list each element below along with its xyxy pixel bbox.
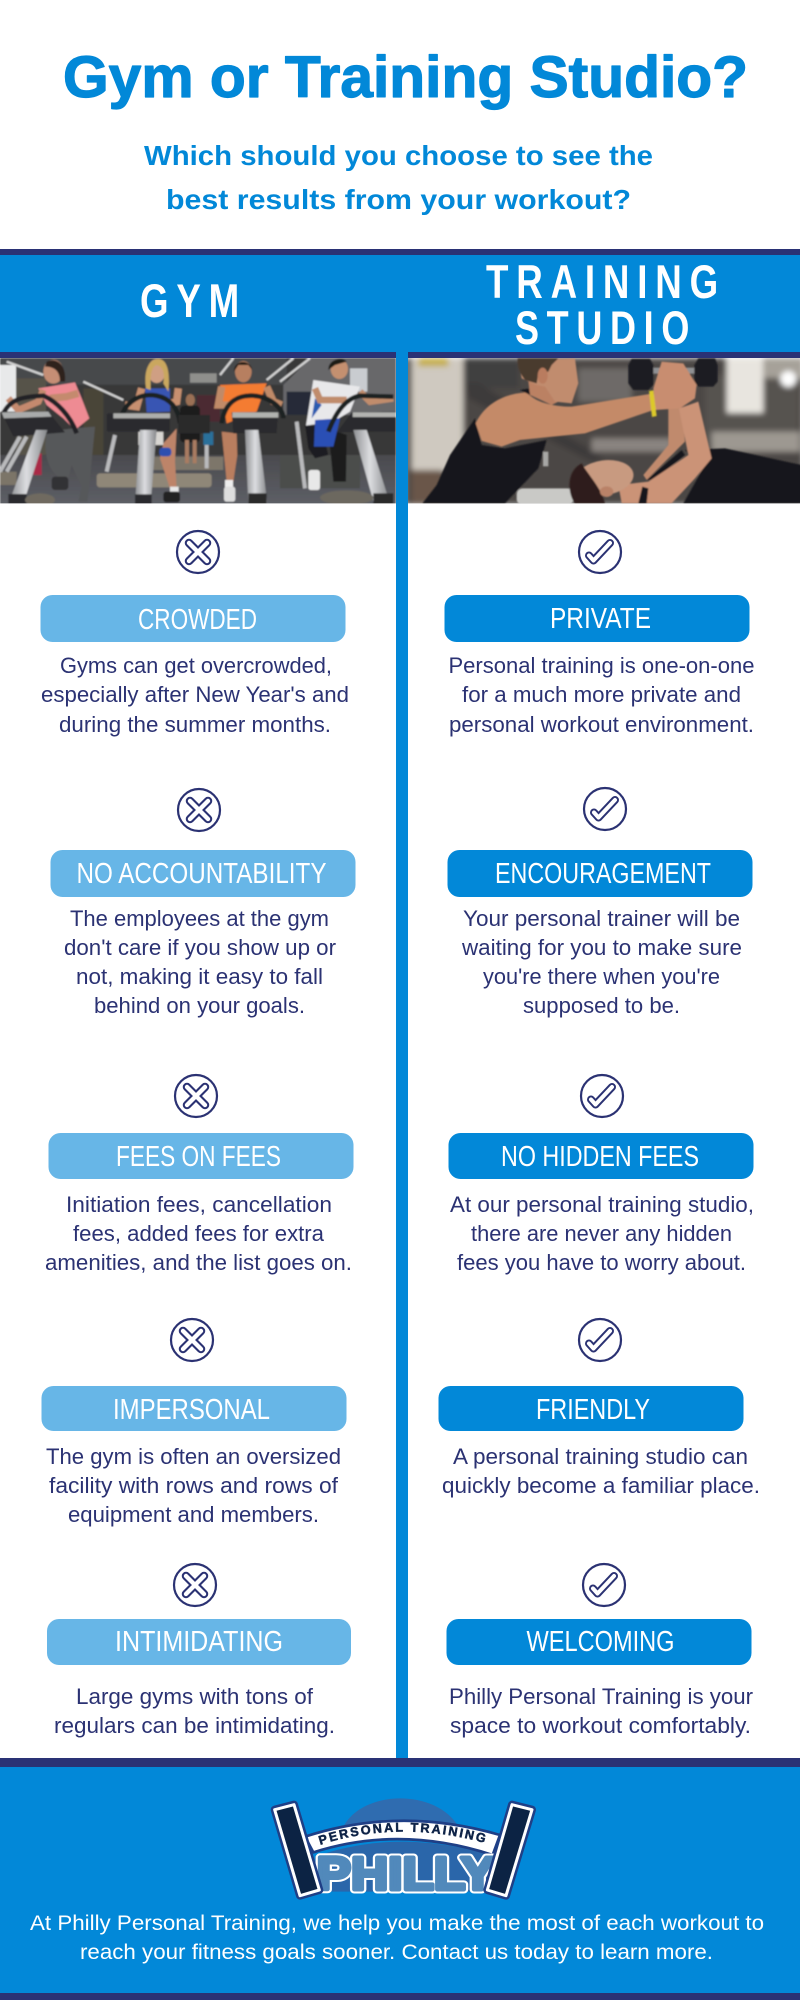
item: impersonal xyxy=(42,1319,346,1527)
text block: supposed to be. xyxy=(523,993,680,1018)
text block: don't care if you show up or xyxy=(64,935,336,960)
pill heading xyxy=(40,595,346,642)
text block xyxy=(442,1444,760,1498)
pill heading xyxy=(42,1386,346,1431)
header band xyxy=(0,249,800,1758)
item: crowded xyxy=(40,531,349,737)
text block xyxy=(41,653,349,737)
icon: check mark xyxy=(579,531,621,573)
text block: The gym is often an oversized xyxy=(46,1444,341,1469)
pill heading: NO ACCOUNTABILITY xyxy=(76,858,326,890)
logo: philly personal training: PHILLY xyxy=(317,1847,495,1899)
text block: fees you have to worry about. xyxy=(457,1250,746,1275)
text block: waiting for you to make sure xyxy=(461,935,742,960)
heading: gym: GYM xyxy=(140,274,247,327)
icon: x mark xyxy=(171,1319,213,1361)
text block: there are never any hidden xyxy=(471,1221,732,1246)
pill heading xyxy=(438,1386,744,1431)
subtitle: best results from your workout? xyxy=(166,184,631,215)
icon: x mark xyxy=(174,1564,216,1606)
wristband xyxy=(649,390,657,417)
text block: A personal training studio can xyxy=(453,1444,748,1469)
pill heading: CROWDED xyxy=(138,604,257,636)
text block: you're there when you're xyxy=(483,964,720,989)
text block xyxy=(46,1444,341,1527)
icon: x mark xyxy=(178,789,220,831)
text block: behind on your goals. xyxy=(94,993,305,1018)
icon: x mark xyxy=(175,1075,217,1117)
icon: check mark xyxy=(584,788,626,830)
icon: check mark xyxy=(581,1075,623,1117)
bench and white pants xyxy=(517,488,573,505)
text block xyxy=(54,1684,335,1738)
man tank xyxy=(422,418,547,503)
panel: training studio column xyxy=(438,531,760,1738)
text block: quickly become a familiar place. xyxy=(442,1473,760,1498)
pill heading: FEES ON FEES xyxy=(116,1141,281,1173)
background man xyxy=(186,394,195,406)
item: no hidden fees xyxy=(448,1075,754,1275)
item: welcoming xyxy=(446,1564,753,1738)
pill heading xyxy=(47,1619,351,1665)
treadmill xyxy=(97,473,212,487)
title: Gym or Training Studio? xyxy=(63,45,748,110)
text block: Personal training is one-on-one xyxy=(448,653,754,678)
text block: Philly Personal Training is your xyxy=(449,1684,753,1709)
heading: training studio: TRAINING xyxy=(486,255,726,308)
pill heading xyxy=(48,1133,354,1179)
text block xyxy=(449,1684,753,1738)
logo: philly personal training xyxy=(270,1798,536,1900)
text block: facility with rows and rows of xyxy=(49,1473,339,1498)
text block: for a much more private and xyxy=(462,682,741,707)
heading: training studio: STUDIO xyxy=(515,301,697,354)
icon: check mark xyxy=(579,1319,621,1361)
pill heading: PRIVATE xyxy=(550,603,651,635)
pill heading: ENCOURAGEMENT xyxy=(495,858,711,890)
text block: fees, added fees for extra xyxy=(73,1221,325,1246)
pill heading: FRIENDLY xyxy=(536,1394,650,1426)
text block: Large gyms with tons of xyxy=(76,1684,314,1709)
text block: closing message: reach your fitness goals sooner. Contact us today to learn more. xyxy=(80,1940,713,1964)
text block: The employees at the gym xyxy=(70,906,329,931)
panel: footer xyxy=(0,1758,800,2000)
text block: during the summer months. xyxy=(59,712,331,737)
hands xyxy=(653,362,697,410)
pill heading xyxy=(50,850,356,897)
pill heading xyxy=(446,1619,752,1665)
heading: training studio xyxy=(486,255,726,354)
dumbbell xyxy=(652,368,697,374)
text block: Gyms can get overcrowded, xyxy=(60,653,332,678)
icon: x mark xyxy=(177,531,219,573)
woman body xyxy=(683,448,800,503)
text block xyxy=(448,653,754,737)
subtitle xyxy=(144,140,653,215)
pill heading: NO HIDDEN FEES xyxy=(501,1141,699,1173)
logo: philly personal training: PERSONAL TRAINING xyxy=(318,1822,486,1845)
text block: Initiation fees, cancellation xyxy=(66,1192,332,1217)
pill heading xyxy=(448,850,752,897)
text block xyxy=(461,906,742,1018)
text block xyxy=(45,1192,352,1275)
text block: space to workout comfortably. xyxy=(450,1713,751,1738)
pill heading: IMPERSONAL xyxy=(113,1394,270,1426)
photo: trainer and client xyxy=(405,358,800,505)
item: private xyxy=(444,531,754,737)
text block: At our personal training studio, xyxy=(450,1192,754,1217)
text block xyxy=(64,906,336,1018)
pill heading xyxy=(448,1133,754,1179)
photo: gym cyclists xyxy=(0,358,396,507)
text block: regulars can be intimidating. xyxy=(54,1713,335,1738)
text block xyxy=(450,1192,754,1275)
pill heading: WELCOMING xyxy=(526,1626,674,1658)
text block: closing message xyxy=(30,1911,764,1964)
text block: equipment and members. xyxy=(68,1502,319,1527)
item: intimidating xyxy=(47,1564,351,1738)
text block: Your personal trainer will be xyxy=(463,906,740,931)
item: friendly xyxy=(438,1319,760,1498)
panel: gym column xyxy=(40,531,356,1738)
item: fees on fees xyxy=(45,1075,354,1275)
item: encouragement xyxy=(448,788,752,1018)
item: no accountability xyxy=(50,789,356,1018)
man 4 xyxy=(305,425,328,458)
text block: amenities, and the list goes on. xyxy=(45,1250,352,1275)
man arm xyxy=(476,392,658,447)
text block: especially after New Year's and xyxy=(41,682,349,707)
pill heading: INTIMIDATING xyxy=(115,1626,283,1658)
text block: closing message: At Philly Personal Training, we help you make the most of each workout to xyxy=(30,1911,764,1935)
icon: check mark xyxy=(583,1564,625,1606)
text block: not, making it easy to fall xyxy=(76,964,323,989)
subtitle: Which should you choose to see the xyxy=(144,140,653,171)
man 3 xyxy=(222,432,237,482)
woman 2 xyxy=(160,428,177,488)
logo: philly personal training: PHILLY xyxy=(317,1847,495,1899)
woman 1 xyxy=(45,427,95,502)
pill heading xyxy=(444,595,750,642)
text block: personal workout environment. xyxy=(449,712,754,737)
